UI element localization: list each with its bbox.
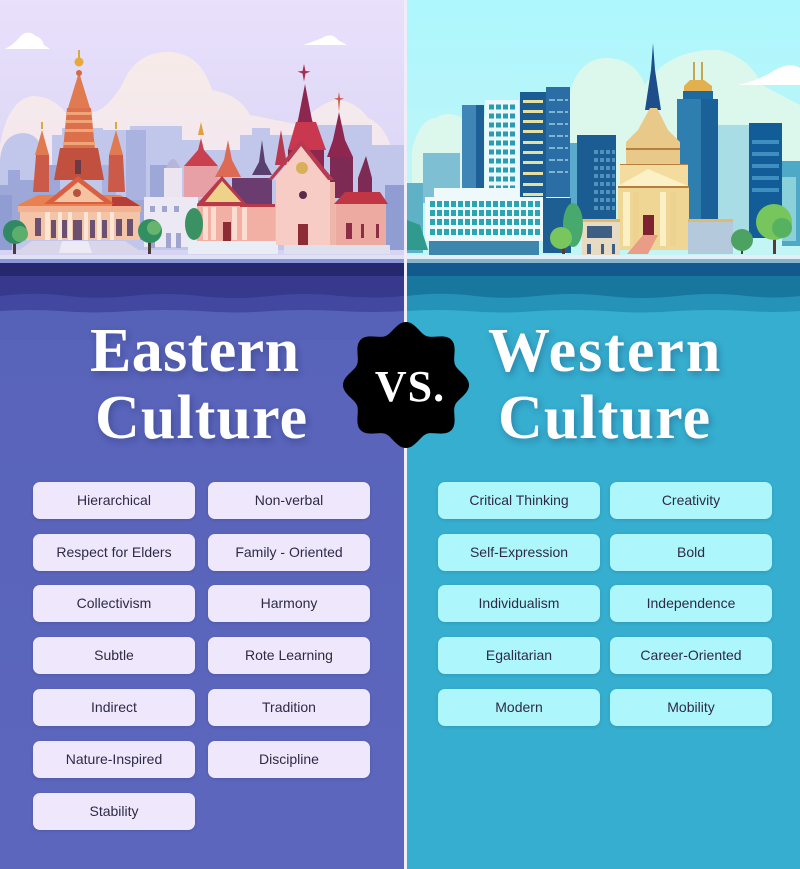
chip	[33, 585, 195, 622]
chip: Mobility	[667, 699, 715, 715]
vs label: VS.	[375, 362, 445, 411]
white domed building	[144, 159, 198, 248]
chip	[438, 585, 600, 622]
right trees	[550, 203, 792, 254]
chip	[208, 482, 370, 519]
red tiered tower	[184, 122, 272, 197]
right low glass building	[425, 188, 571, 255]
chip	[208, 741, 370, 778]
chip: Creativity	[662, 492, 720, 508]
chip: Critical Thinking	[469, 492, 569, 508]
cathedral	[268, 64, 390, 254]
chip: Independence	[647, 595, 735, 611]
chip: Discipline	[259, 751, 319, 767]
chip: Nature-Inspired	[66, 751, 162, 767]
chip: Career-Oriented	[640, 647, 742, 663]
left distant skyline	[0, 125, 404, 250]
chip	[208, 637, 370, 674]
chip	[610, 534, 772, 571]
chip: Collectivism	[77, 595, 151, 611]
chip	[438, 534, 600, 571]
chip	[33, 534, 195, 571]
right water bands	[407, 255, 800, 340]
chip: Family - Oriented	[235, 544, 343, 560]
vs badge	[343, 322, 469, 448]
chip: Tradition	[262, 699, 316, 715]
chip: Harmony	[261, 595, 317, 611]
chip: Modern	[495, 699, 543, 715]
chip	[610, 637, 772, 674]
right clouds	[412, 50, 800, 200]
chip	[438, 689, 600, 726]
right church tower	[581, 43, 733, 255]
chip	[208, 534, 370, 571]
trees	[3, 208, 203, 254]
chip: Non-verbal	[255, 492, 323, 508]
chip	[610, 585, 772, 622]
left panel: eastern background	[0, 0, 404, 869]
chip: Bold	[677, 544, 705, 560]
chip	[33, 793, 195, 830]
right skyline	[407, 62, 800, 253]
chip	[208, 585, 370, 622]
chip: Respect for Elders	[56, 544, 172, 560]
chip: Indirect	[91, 699, 137, 715]
chip: Hierarchical	[77, 492, 151, 508]
chip	[33, 741, 195, 778]
left clouds	[0, 33, 392, 200]
title: eastern: Eastern	[90, 317, 299, 385]
chip	[610, 689, 772, 726]
chip	[438, 637, 600, 674]
chip: Stability	[89, 803, 139, 819]
left buildings	[3, 50, 390, 254]
left water bands	[0, 255, 404, 340]
eastern traits list	[32, 482, 370, 832]
chip	[610, 482, 772, 519]
chip	[33, 637, 195, 674]
right panel: western background	[407, 0, 800, 869]
western traits list	[437, 482, 773, 728]
chip	[208, 689, 370, 726]
title: culture right: Culture	[498, 384, 711, 452]
temple complex	[15, 50, 143, 253]
church with portico	[188, 176, 278, 254]
chip: Rote Learning	[245, 647, 333, 663]
title: culture left: Culture	[95, 384, 308, 452]
chip	[33, 482, 195, 519]
centre divider	[404, 0, 407, 869]
title: western: Western	[488, 317, 722, 385]
chip: Egalitarian	[486, 647, 552, 663]
chip: Subtle	[94, 647, 134, 663]
chip: Self-Expression	[470, 544, 568, 560]
chip	[438, 482, 600, 519]
chip	[33, 689, 195, 726]
chip: Individualism	[479, 595, 559, 611]
